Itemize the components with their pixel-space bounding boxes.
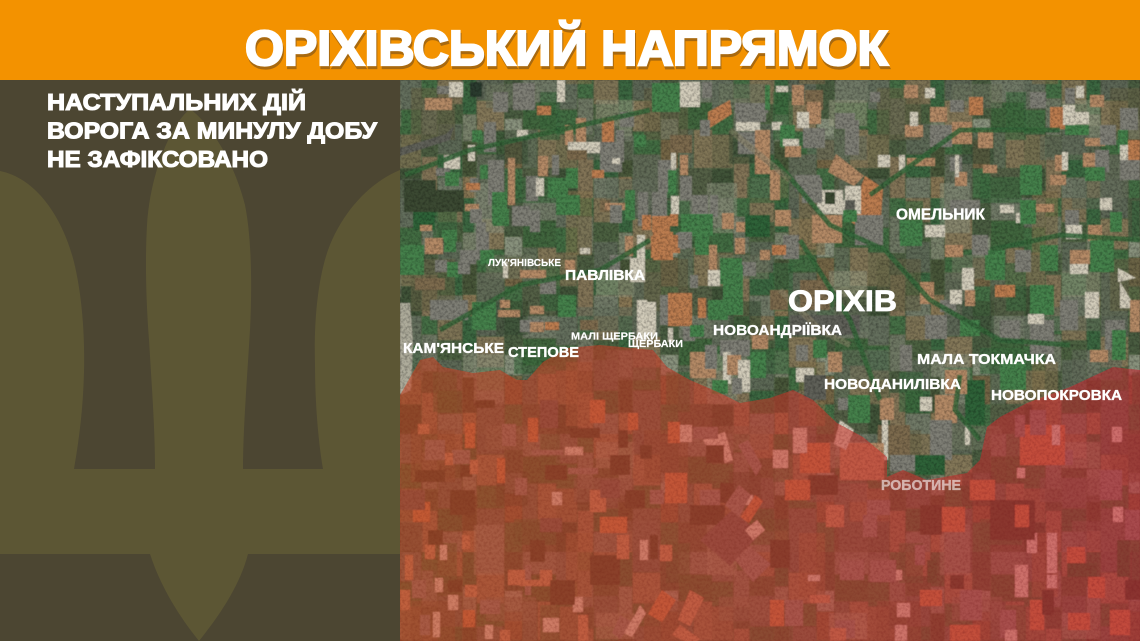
label: Mala Tokmachka: МАЛА ТОКМАЧКА [917, 351, 1056, 368]
panel: left background [0, 80, 400, 641]
label: Robotyne: РОБОТИНЕ [881, 478, 961, 494]
mid band [653, 232, 673, 260]
text block: no enemy offensive: НЕ ЗАФІКСОВАНО [47, 146, 268, 172]
label: Orikhiv: ОРІХІВ [788, 285, 897, 318]
label: Kamianske: КАМ'ЯНСЬКЕ [403, 341, 504, 357]
red occupied zone [400, 345, 1140, 641]
title: ОРІХІВСЬКИЙ НАПРЯМОК [245, 21, 888, 76]
header bar [0, 0, 1140, 80]
label: Stepove: СТЕПОВЕ [508, 345, 579, 361]
text block: no enemy offensive: ВОРОГА ЗА МИНУЛУ ДОБУ [47, 118, 377, 144]
text block: no enemy offensive: НАСТУПАЛЬНИХ ДІЙ [47, 88, 306, 115]
label: Novodanylivka: НОВОДАНИЛІВКА [824, 376, 961, 393]
label: Omelnyk: ОМЕЛЬНИК [896, 206, 986, 224]
place labels [403, 206, 1122, 494]
icon: trident emblem [0, 109, 400, 641]
text block: no enemy offensive [47, 88, 377, 172]
label: Mali Shcherbaky: МАЛІ ЩЕРБАКИ [571, 330, 658, 342]
label: Novoandriivka: НОВОАНДРІЇВКА [713, 322, 843, 339]
map: satellite view [400, 80, 1140, 641]
east [770, 170, 780, 200]
map fields [400, 80, 1140, 641]
label: Pavlivka: ПАВЛІВКА [565, 268, 646, 284]
label: Novopokrovka: НОВОПОКРОВКА [991, 387, 1122, 404]
label: Shcherbaky: ЩЕРБАКИ [628, 338, 683, 350]
texture: field mottling [400, 80, 1140, 641]
south fields [590, 400, 605, 423]
label: Lukianivske: ЛУК'ЯНІВСЬКЕ [488, 258, 561, 269]
